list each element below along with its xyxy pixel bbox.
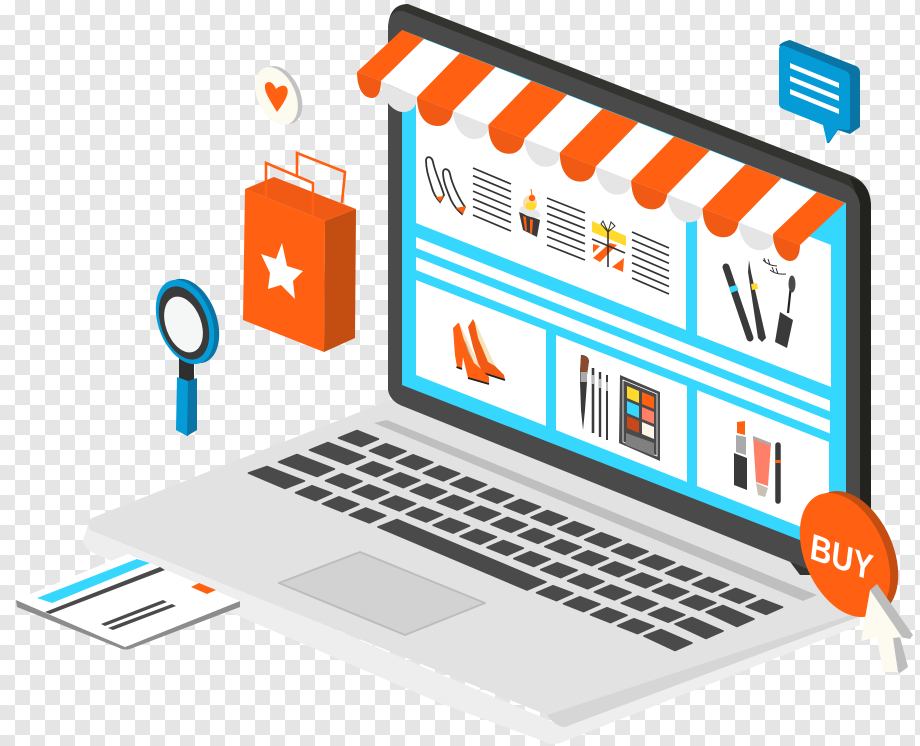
card face [16, 554, 240, 647]
icon: high heels [453, 319, 505, 384]
panel: top products [416, 60, 686, 330]
star [261, 243, 303, 299]
buy label: BUY [808, 526, 875, 589]
bezel [388, 11, 860, 590]
icon: eyeshadow palette [619, 375, 660, 461]
card edge [16, 600, 240, 650]
icon: shopping bag [243, 153, 356, 352]
back handle [297, 153, 345, 203]
bag side [324, 209, 356, 352]
icon: flat shoes [426, 157, 466, 214]
card orange tag [191, 583, 216, 594]
touchpad [279, 552, 485, 635]
bag inside [245, 177, 356, 221]
bag front [243, 189, 325, 352]
icon: makeup brushes [580, 355, 608, 440]
icon: heart badge [247, 59, 311, 132]
banner strip 2 [416, 257, 830, 434]
laptop base [83, 396, 861, 744]
icon: eye makeup [726, 258, 796, 348]
panel: brushes [556, 335, 687, 482]
mascara [788, 285, 791, 313]
icon: magnifier [145, 271, 230, 436]
right edge [850, 178, 871, 575]
eyeliner [726, 267, 750, 338]
banner strip 1 [416, 237, 830, 412]
key row 4 [296, 486, 692, 650]
repeated stripes [417, 53, 817, 250]
rear shoe [468, 319, 505, 380]
awning [357, 30, 845, 261]
first stripes [357, 30, 460, 112]
panel: lipstick [697, 390, 829, 538]
panel: heels [416, 280, 546, 426]
front shoe [453, 323, 489, 384]
icon: cupcake [518, 189, 542, 237]
pencil [748, 260, 766, 342]
handle [176, 377, 197, 436]
buy button [782, 477, 916, 631]
text lines 3 [632, 232, 669, 294]
base thickness [83, 525, 860, 744]
keyboard deck [88, 396, 860, 715]
keyboard [248, 430, 783, 650]
card cyan bar [37, 559, 150, 603]
key row 1 [370, 444, 783, 614]
hinge band [374, 420, 817, 601]
key row 2 [356, 462, 754, 626]
front handle [266, 163, 313, 215]
icon: chat bubble [779, 40, 860, 143]
text lines 1 [473, 168, 511, 231]
laptop screen [357, 4, 871, 590]
last stripe [773, 192, 845, 261]
key row 3 [326, 474, 723, 638]
space bar [378, 520, 546, 590]
panel: top right [697, 192, 831, 387]
card dark line [45, 567, 165, 614]
lashes [763, 258, 786, 274]
icon: gift [592, 221, 626, 272]
outer dark shell [388, 4, 871, 575]
text lines 2 [547, 198, 585, 260]
card lines [101, 600, 176, 630]
icon: lipstick and tube [734, 421, 781, 501]
card [16, 554, 240, 650]
base front band [547, 610, 861, 727]
wide keys [248, 430, 378, 488]
screen background [402, 30, 846, 558]
icon: cursor arrow [861, 584, 913, 673]
neck [179, 358, 194, 382]
